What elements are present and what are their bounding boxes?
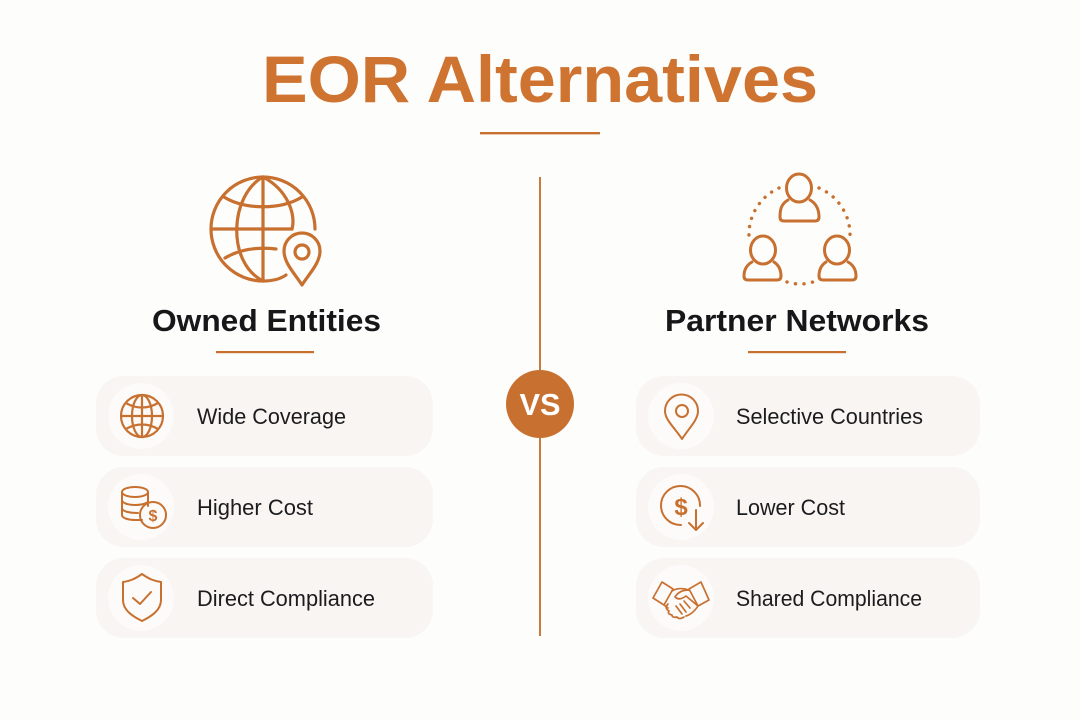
title: EOR Alternatives xyxy=(262,42,818,116)
row: shared compliance: Shared Compliance xyxy=(736,586,922,611)
heading: partner networks: Partner Networks xyxy=(665,303,929,338)
icon: handshake xyxy=(653,582,709,618)
icon: people network xyxy=(744,174,856,284)
row: higher cost: Higher Cost xyxy=(197,495,313,520)
VS badge: VS xyxy=(520,387,560,422)
row: wide coverage xyxy=(96,376,433,456)
icon: pin xyxy=(665,395,698,439)
row: direct compliance: Direct Compliance xyxy=(197,586,375,611)
icon: dollar down xyxy=(661,486,703,530)
row: direct compliance xyxy=(96,558,433,638)
row: lower cost xyxy=(636,467,980,547)
icon: dollar down: $ xyxy=(674,494,688,521)
center divider xyxy=(539,177,541,636)
heading: owned entities: Owned Entities xyxy=(152,303,381,338)
row: higher cost xyxy=(96,467,433,547)
panel: owned entities xyxy=(96,177,433,638)
icon: shield check xyxy=(123,574,161,621)
icon: small globe xyxy=(121,395,163,437)
icon: globe with pin xyxy=(211,177,320,285)
title underline xyxy=(480,132,600,134)
row: selective countries xyxy=(636,376,980,456)
row: selective countries: Selective Countries xyxy=(736,404,923,429)
VS badge xyxy=(506,370,574,438)
panel: partner networks xyxy=(636,174,980,638)
icon: coins xyxy=(122,487,166,528)
heading underline xyxy=(216,351,314,353)
row: wide coverage: Wide Coverage xyxy=(197,404,346,429)
heading underline xyxy=(748,351,846,353)
icon: coins: $ xyxy=(149,508,158,525)
row: shared compliance xyxy=(636,558,980,638)
row: lower cost: Lower Cost xyxy=(736,495,845,520)
